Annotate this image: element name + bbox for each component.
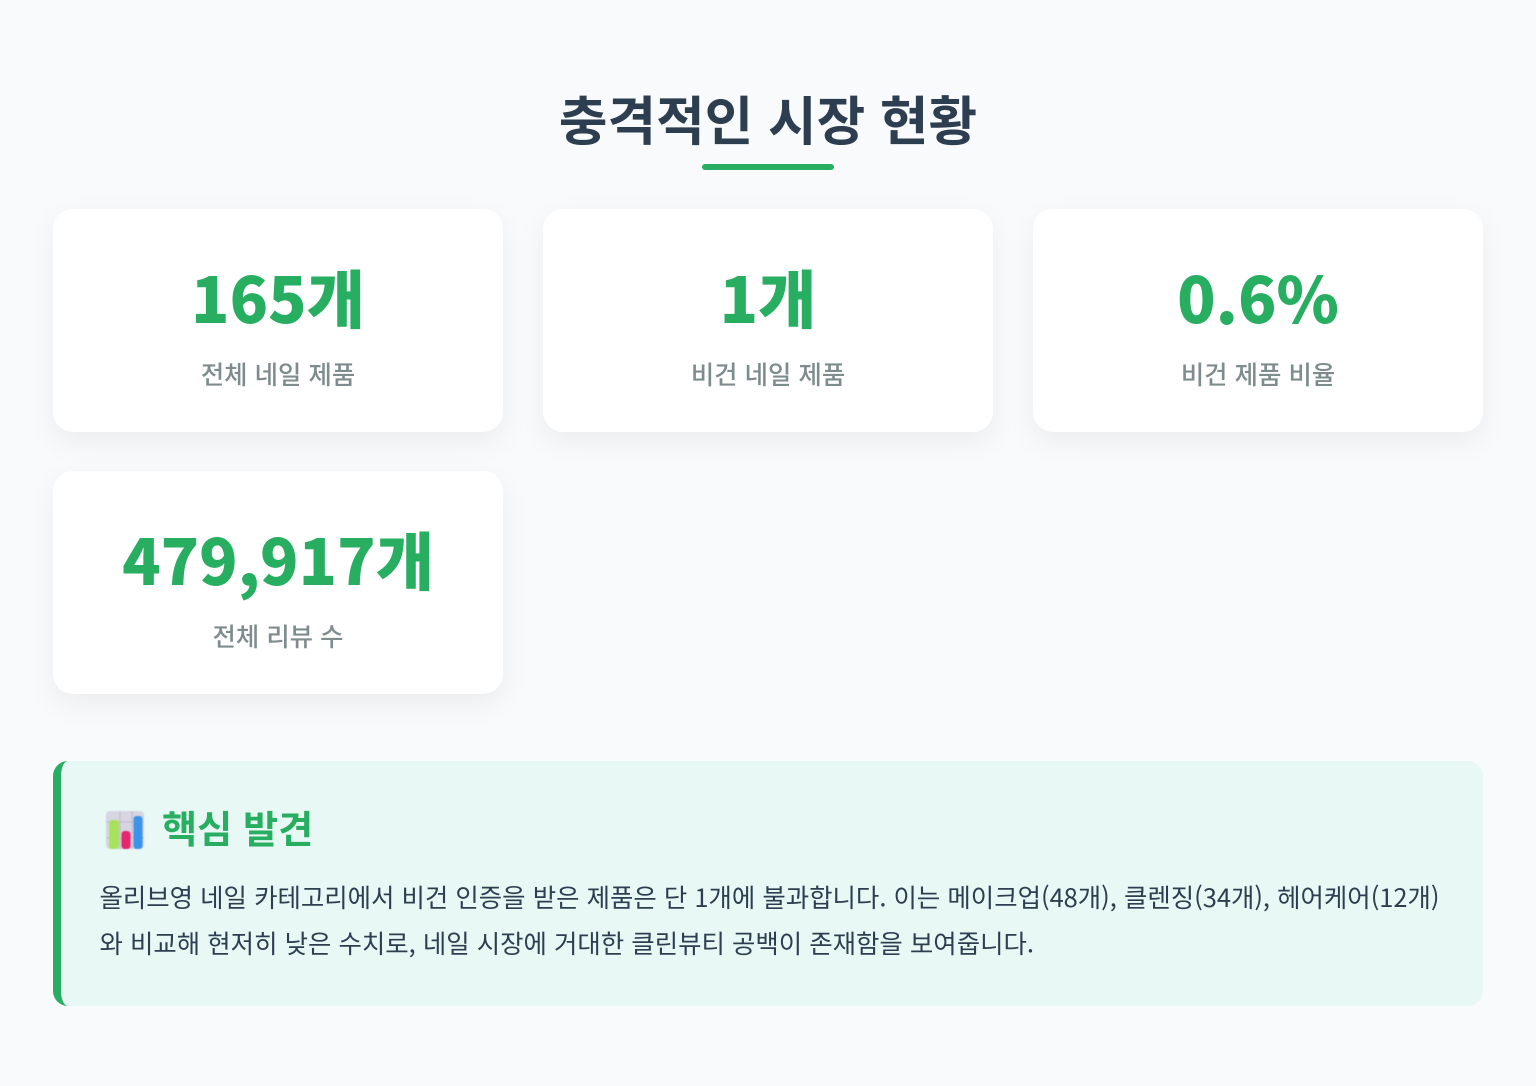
panel: total reviews (53, 471, 503, 694)
panel: total nail products (53, 209, 503, 432)
stat label: 비건 네일 제품 (691, 356, 845, 392)
callout heading: 핵심 발견 (162, 800, 313, 855)
stat number: 1개 (720, 251, 816, 342)
panel: key findings callout (53, 761, 1483, 1006)
callout body text: 올리브영 네일 카테고리에서 비건 인증을 받은 제품은 단 1개에 불과합니다. 이는 메이크업(48개), 클렌징(34개), 헤어케어(12개) (100, 879, 1440, 915)
stat label: 비건 제품 비율 (1181, 356, 1335, 392)
title underline (702, 164, 834, 170)
title: 충격적인 시장 현황 (559, 80, 977, 156)
callout body text (100, 879, 1440, 961)
stat number: 165개 (191, 251, 365, 342)
stat label: 전체 네일 제품 (201, 356, 355, 392)
stat number: 0.6% (1177, 251, 1339, 342)
icon: bar chart emoji (106, 810, 144, 850)
panel: vegan product ratio (1033, 209, 1483, 432)
panel: vegan nail products (543, 209, 993, 432)
stat number: 479,917개 (122, 513, 434, 604)
callout body text: 와 비교해 현저히 낮은 수치로, 네일 시장에 거대한 클린뷰티 공백이 존재함을 보여줍니다. (100, 925, 1034, 961)
stat label: 전체 리뷰 수 (212, 618, 344, 654)
